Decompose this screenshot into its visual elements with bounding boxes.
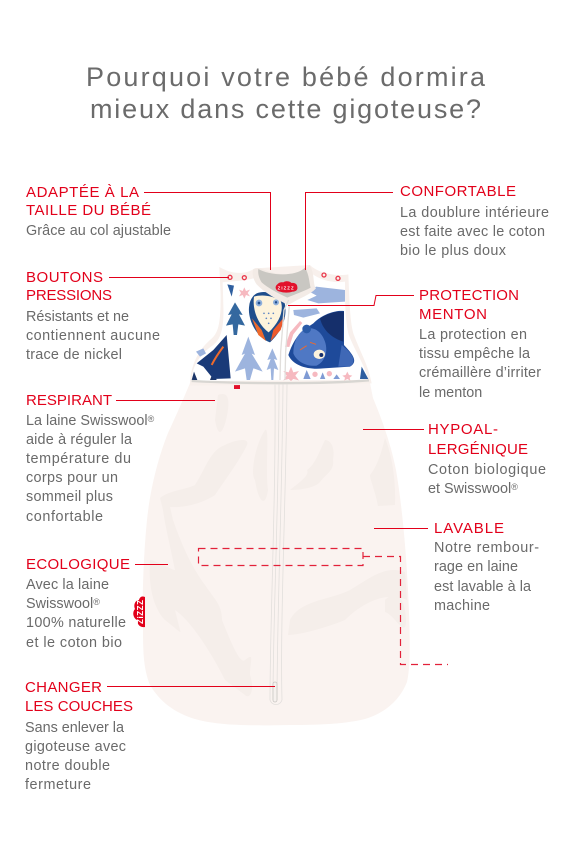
print: trees and plants xyxy=(192,284,368,380)
callout: confortable: La doublure intérieure xyxy=(400,205,549,221)
callout: adaptée à la taille du bébé: ADAPTÉE À LA xyxy=(26,184,139,201)
arrow: adaptée to collar xyxy=(144,192,270,270)
side logo: ZiZZZ xyxy=(136,600,145,624)
callout: respirant: La laine Swisswool xyxy=(26,413,148,429)
title: mieux dans cette gigoteuse? xyxy=(90,94,481,124)
arrow: boutons to studs xyxy=(109,276,229,278)
callout: protection menton: PROTECTION xyxy=(419,287,519,304)
callout: protection menton: tissu empêche la xyxy=(419,346,530,362)
arrow: respirant xyxy=(116,400,215,402)
arrow: hypoallergénique xyxy=(363,428,424,430)
logo on collar: ZiZZZ xyxy=(278,285,294,290)
callout: changer les couches: gigoteuse avec xyxy=(25,739,126,755)
callout: boutons pressions: BOUTONS xyxy=(26,269,103,286)
callout: protection menton: crémaillère d’irriter xyxy=(419,365,541,381)
zipper slider xyxy=(273,682,277,702)
callout: ecologique: ® xyxy=(93,597,100,607)
callout: boutons pressions: trace de nickel xyxy=(26,347,122,363)
print: wolf xyxy=(197,335,231,379)
callout: boutons pressions: contiennent aucune xyxy=(26,328,160,344)
sack fold shadows xyxy=(150,394,407,696)
callout: lavable: est lavable à la xyxy=(434,579,531,595)
callout: changer les couches: CHANGER xyxy=(25,679,102,696)
print: blue streaks xyxy=(293,287,345,318)
callout: ecologique: Avec la laine xyxy=(26,577,109,593)
callout: protection menton: MENTON xyxy=(419,306,487,323)
arrow: protection to chin guard xyxy=(288,296,414,306)
small red tag xyxy=(234,381,240,389)
vest trim xyxy=(190,265,372,386)
illustration: sleeping bag xyxy=(143,265,410,725)
callout: lavable: machine xyxy=(434,598,490,614)
side logo xyxy=(133,596,145,627)
vest waistband xyxy=(192,380,369,383)
callout: respirant: RESPIRANT xyxy=(26,392,112,409)
callout: adaptée à la taille du bébé: Grâce au col ajustable xyxy=(26,223,171,239)
vest xyxy=(190,265,372,386)
arrow: lavable xyxy=(374,528,428,530)
callout: changer les couches: fermeture xyxy=(25,777,91,793)
callout: confortable: bio le plus doux xyxy=(400,243,507,259)
callout: respirant: corps pour un xyxy=(26,470,118,486)
callout: changer les couches: Sans enlever la xyxy=(25,720,124,736)
callout: respirant: température du xyxy=(26,451,131,467)
zipper xyxy=(270,384,287,704)
arrow: confortable to collar xyxy=(306,192,393,270)
dashed wool filling zone xyxy=(198,548,448,664)
print: bear xyxy=(288,311,354,369)
callout: ecologique: Swisswool xyxy=(26,596,93,612)
zipper top xyxy=(280,300,289,380)
callout: adaptée à la taille du bébé: TAILLE DU BÉBÉ xyxy=(26,202,151,219)
callout: respirant xyxy=(26,392,155,525)
callout: respirant: aide à réguler la xyxy=(26,432,132,448)
callout: boutons pressions xyxy=(26,269,160,363)
callout: lavable: LAVABLE xyxy=(434,520,504,537)
sack body xyxy=(143,378,410,725)
callout: lavable: rage en laine xyxy=(434,559,518,575)
collar xyxy=(253,265,316,305)
arrow: ecologique xyxy=(135,564,168,566)
callout: hypoallergénique: HYPOAL- xyxy=(428,421,498,438)
callout: lavable xyxy=(434,520,539,614)
callout: protection menton: La protection en xyxy=(419,327,527,343)
callout: hypoallergénique: Coton biologique xyxy=(428,462,546,478)
press studs xyxy=(228,273,340,280)
callout: ecologique: et le coton bio xyxy=(26,635,122,651)
callout: protection menton: le menton xyxy=(419,385,482,401)
title: Pourquoi votre bébé dormira xyxy=(86,62,486,92)
callout: hypoallergénique: et Swisswool xyxy=(428,481,511,497)
callout: ecologique xyxy=(26,556,130,651)
callout: protection menton xyxy=(419,287,541,401)
callout: hypoallergénique: ® xyxy=(511,482,518,492)
callout: hypoallergénique xyxy=(428,421,546,497)
callout: changer les couches: LES COUCHES xyxy=(25,698,133,715)
print: pink motifs xyxy=(239,287,352,381)
callout: boutons pressions: PRESSIONS xyxy=(26,287,112,304)
arrow: changer to zipper xyxy=(107,686,275,688)
callout: changer les couches: notre double xyxy=(25,758,110,774)
callout: adaptée à la taille du bébé xyxy=(26,184,171,239)
logo on collar xyxy=(276,281,297,293)
callout: hypoallergénique: LERGÉNIQUE xyxy=(428,441,528,458)
callout: respirant: ® xyxy=(148,414,155,424)
callout: boutons pressions: Résistants et ne xyxy=(26,309,129,325)
callout: changer les couches xyxy=(25,679,133,793)
title xyxy=(86,62,486,124)
callout: ecologique: ECOLOGIQUE xyxy=(26,556,130,573)
callout: confortable: CONFORTABLE xyxy=(400,183,516,200)
vest fabric xyxy=(192,273,368,381)
callout: respirant: confortable xyxy=(26,509,103,525)
callout: lavable: Notre rembour- xyxy=(434,540,539,556)
callout: ecologique: 100% naturelle xyxy=(26,615,126,631)
callout: confortable xyxy=(400,183,549,259)
print: owl xyxy=(249,292,285,342)
callout: confortable: est faite avec le coton xyxy=(400,224,545,240)
callout: respirant: sommeil plus xyxy=(26,489,113,505)
